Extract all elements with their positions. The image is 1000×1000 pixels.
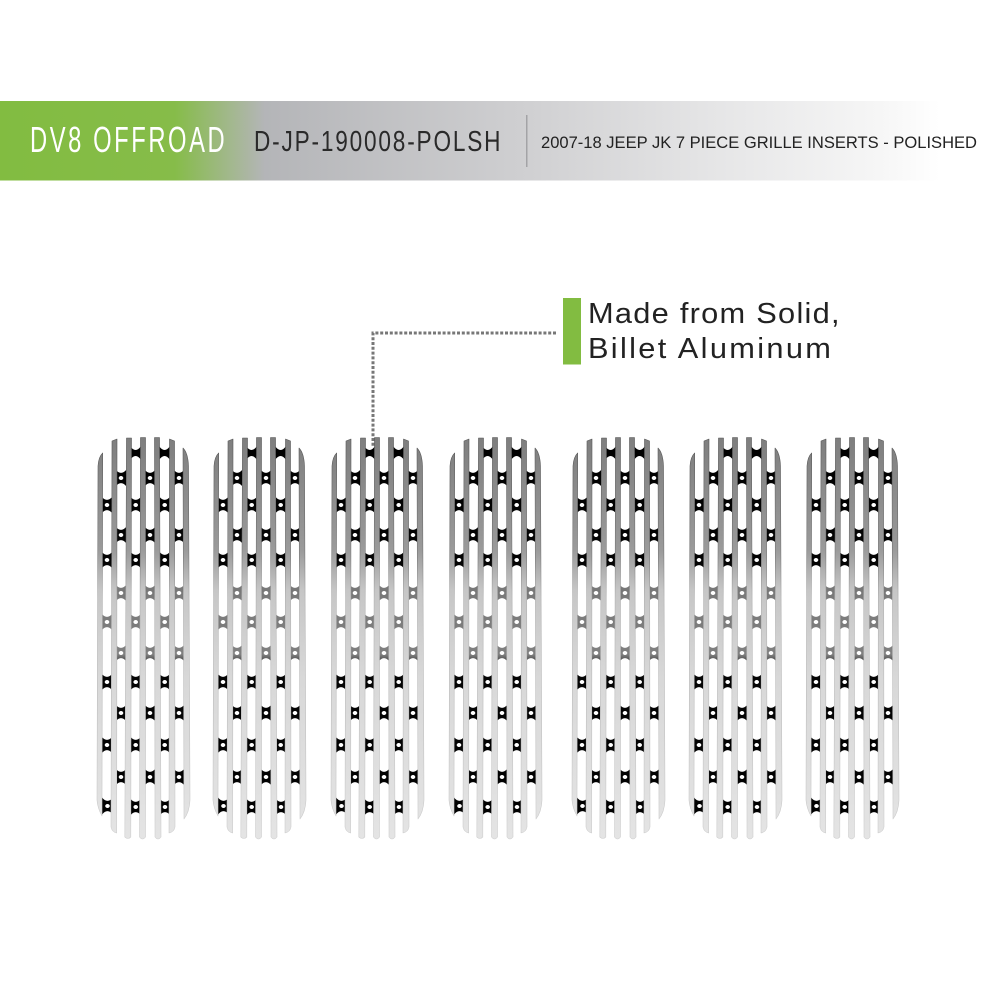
grille insert 1 <box>90 430 200 850</box>
grille insert 4 <box>442 430 552 850</box>
callout: billet aluminum <box>373 298 840 447</box>
band gradient <box>0 101 1000 180</box>
part number: D-JP-190008-POLSH <box>254 124 500 158</box>
grille insert 5 <box>565 430 675 850</box>
infographic canvas <box>0 101 976 840</box>
dotted leader line <box>373 333 556 447</box>
callout green marker <box>563 298 581 364</box>
grille insert 6 <box>682 430 792 850</box>
callout text: Billet Aluminum <box>588 333 831 365</box>
header divider <box>526 115 528 167</box>
header band <box>0 101 1000 180</box>
grille insert 7 <box>799 430 909 850</box>
product title: 2007-18 JEEP JK 7 PIECE GRILLE INSERTS - POLISHED <box>541 133 977 152</box>
callout text: Made from Solid, <box>588 298 840 330</box>
brand name: DV8 OFFROAD <box>30 120 225 160</box>
grille insert 2 <box>206 430 316 850</box>
grille insert 3 <box>324 430 434 850</box>
